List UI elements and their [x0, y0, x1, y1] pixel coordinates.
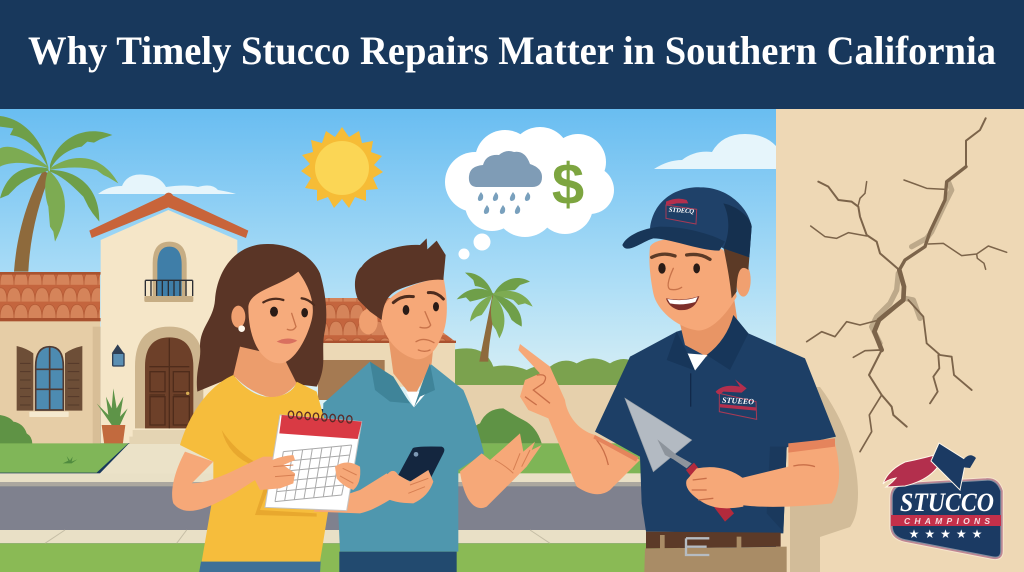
wall panel with cracks [776, 109, 1024, 572]
phone and hand [383, 447, 444, 503]
rain cloud icon [469, 151, 542, 214]
foreground grass [0, 543, 680, 572]
front lawn [0, 443, 128, 473]
jeans [199, 562, 321, 572]
tower wall [101, 210, 237, 443]
upper sidewalk [0, 473, 680, 483]
ear and earring [231, 306, 245, 332]
title: Why Timely Stucco Repairs Matter in Southern California [28, 28, 996, 73]
pointing arm and hand [518, 344, 640, 494]
shrub [0, 415, 32, 444]
cloud right [654, 134, 776, 169]
facial features [393, 293, 443, 351]
left wing roof [0, 272, 101, 321]
bent arm [172, 452, 297, 511]
facial features [652, 254, 710, 310]
Stucco Champions logo [883, 443, 1002, 558]
lower sidewalk [0, 530, 680, 543]
ear [736, 263, 751, 297]
garden wall [450, 385, 677, 444]
walkway [98, 444, 220, 475]
shirt [180, 375, 328, 562]
neck [678, 293, 738, 357]
shuttered window [17, 346, 82, 417]
trowel [625, 398, 734, 522]
collar [370, 362, 435, 407]
large stucco crack [807, 118, 1007, 452]
cloud left [98, 174, 236, 194]
polo shirt [595, 315, 836, 533]
technician's shadow on wall [790, 387, 858, 572]
badge shape [891, 479, 1002, 558]
palm tree right [457, 273, 533, 362]
chest logo: STUEEO [722, 396, 755, 406]
ear [359, 309, 378, 334]
woman in yellow shirt [172, 244, 328, 572]
cap logo: STDECQ [669, 207, 694, 215]
sun [301, 127, 383, 208]
wall lantern [112, 344, 124, 366]
sky background [0, 109, 776, 409]
man's forearm [313, 473, 407, 513]
holding arm and hand [686, 438, 839, 508]
raised left arm and open hand [460, 433, 542, 508]
hair [355, 238, 446, 320]
trousers [339, 552, 457, 572]
belt [646, 532, 781, 555]
cap [622, 187, 752, 257]
five stars: ★★★★★ [909, 527, 987, 541]
undershirt [687, 353, 707, 371]
far lawn [187, 443, 687, 475]
background houses and street [0, 193, 687, 572]
front door [135, 327, 203, 428]
facial features [263, 298, 314, 344]
swoosh [883, 452, 945, 487]
chest logo [716, 379, 757, 419]
far hedge [450, 348, 680, 387]
technician [518, 187, 839, 572]
entry steps [129, 430, 187, 444]
wordmark: STUCCO [900, 488, 994, 517]
neck [388, 337, 433, 398]
red band [891, 515, 1001, 526]
trowel mark [931, 443, 966, 490]
shirt [322, 362, 484, 552]
road [0, 487, 680, 530]
face [380, 277, 447, 359]
balcony window [144, 242, 193, 302]
far bush [472, 408, 542, 443]
man in teal shirt [322, 238, 542, 572]
collar [667, 315, 748, 371]
tagline: CHAMPIONS [904, 516, 990, 526]
left wing wall [0, 320, 100, 444]
thought bubble [445, 127, 614, 260]
face [649, 239, 737, 331]
neck [233, 347, 297, 397]
woman's hands on calendar [252, 455, 360, 490]
hair [197, 244, 326, 392]
grass tuft [63, 456, 77, 463]
trousers [644, 547, 787, 572]
dollar sign icon: $ [552, 152, 584, 217]
hair [723, 247, 749, 298]
face [248, 272, 313, 363]
calendar [265, 411, 362, 511]
back house [317, 298, 456, 400]
undershirt [406, 392, 427, 407]
tower roof [89, 193, 248, 238]
title banner [0, 0, 1024, 109]
palm tree left [0, 116, 118, 272]
potted plant [97, 388, 128, 445]
